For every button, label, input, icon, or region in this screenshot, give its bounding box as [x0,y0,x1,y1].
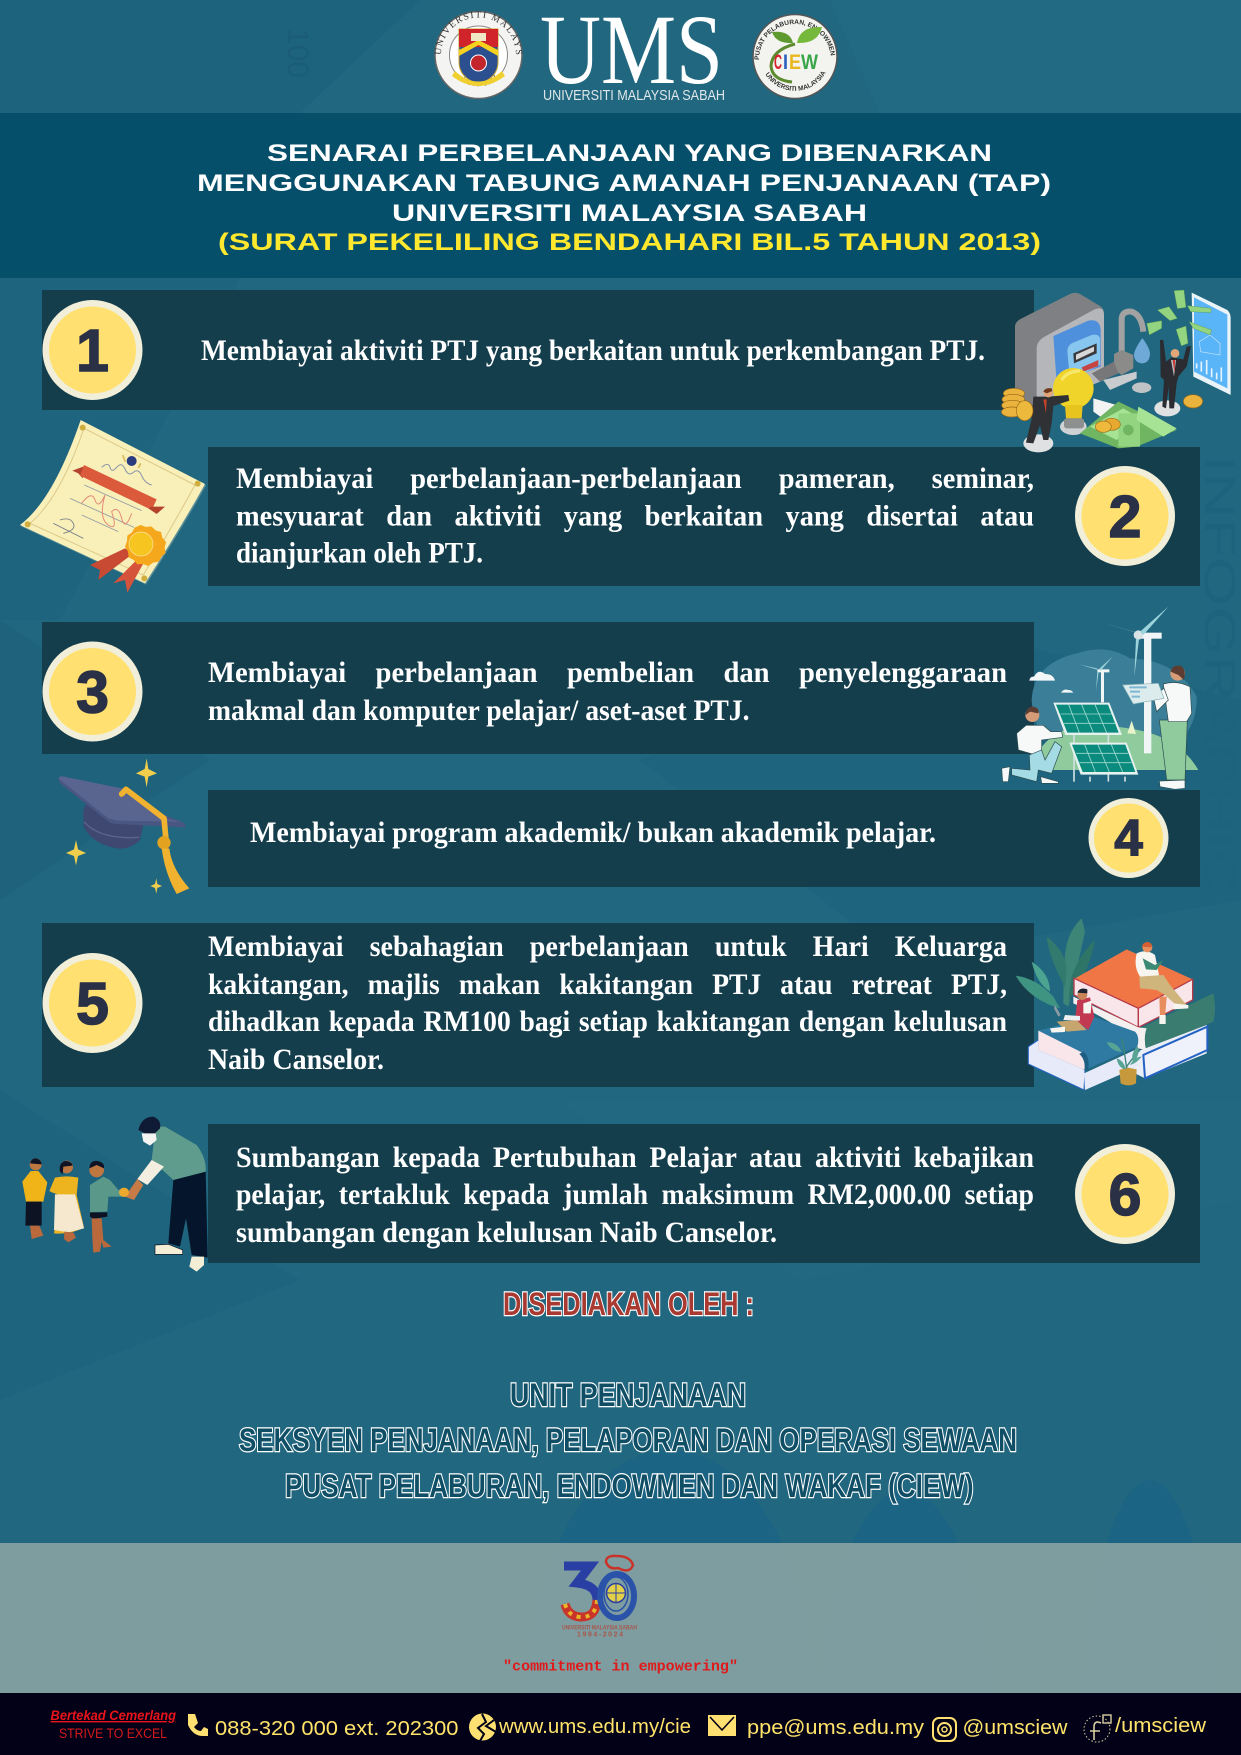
text block: unit details: PUSAT PELABURAN, ENDOWMEN DAN WAKAF (CIEW) [285,1468,974,1504]
text block: unit details: SEKSYEN PENJANAAN, PELAPORAN DAN OPERASI SEWAAN [239,1422,1017,1458]
text block: unit details: UNIT PENJANAAN [510,1377,746,1413]
icon: books and readers illustration [1016,918,1215,1090]
logo: UMS 30 years: UNIVERSITI MALAYSIA SABAH [562,1626,637,1632]
number badge 5: 5 [76,971,109,1037]
icon: utilities and money illustration [1001,290,1231,452]
number badge 6 [1075,1144,1175,1244]
background: 100 [281,28,314,78]
panel: item 1 [42,290,1034,410]
text: item 3 [208,657,1007,727]
panel: item 5 [42,923,1034,1087]
number badge 3: 3 [76,660,109,726]
icon: mail [708,1715,736,1736]
number badge 1: 1 [76,318,109,384]
text: item 5: kakitangan, majlis makan kakitangan PTJ atau retreat PTJ, [208,969,1007,1001]
number badge 4 [1088,798,1168,878]
number badge 4: 4 [1114,809,1143,866]
number badge 6: 6 [1109,1162,1141,1228]
contact: phone: 088-320 000 ext. 202300 [215,1718,458,1740]
panel: item 2 [208,447,1200,586]
text: item 2: Membiayai perbelanjaan-perbelanjaan pameran, seminar, [236,463,1034,495]
text: item 5: Membiayai sebahagian perbelanjaan untuk Hari Keluarga [208,931,1007,963]
title: SENARAI PERBELANJAAN YANG DIBENARKAN [267,140,992,167]
number badge 2 [1075,466,1175,566]
title: MENGGUNAKAN TABUNG AMANAH PENJANAAN (TAP) [197,170,1051,197]
text: item 6: sumbangan dengan kelulusan Naib Canselor. [236,1217,777,1249]
text: item 2: mesyuarat dan aktiviti yang berkaitan yang disertai atau [236,500,1034,532]
text: item 4: Membiayai program akademik/ bukan akademik pelajar. [250,817,936,849]
slogan [50,1707,176,1741]
number badge 3 [42,642,142,742]
logo: UMS 30 years: 1994-2024 [577,1632,623,1638]
contact: facebook: /umsciew [1115,1715,1207,1737]
contact: email: ppe@ums.edu.my [747,1717,924,1739]
title: (SURAT PEKELILING BENDAHARI BIL.5 TAHUN 2013) [218,229,1041,256]
logo: CIEW: W [801,51,818,74]
contact: instagram: @umsciew [962,1717,1068,1739]
text: item 5: Naib Canselor. [208,1044,384,1076]
logo: UMS crest: SABAH [464,74,495,86]
text block: unit details [239,1377,1017,1504]
panel: title band [0,113,1241,278]
panel: item 4 [208,790,1200,887]
text: item 2 [236,463,1034,570]
text: item 6: pelajar, tertakluk kepada jumlah maksimum RM2,000.00 setiap [236,1179,1034,1211]
icon: graduation cap [58,758,189,894]
text: item 6: Sumbangan kepada Pertubuhan Pelajar atau aktiviti kebajikan [236,1142,1034,1174]
contact: website: www.ums.edu.my/cie [498,1716,691,1738]
icon: instagram [933,1718,956,1741]
logo: CIEW: C [774,51,782,74]
panel: item 3 [42,622,1034,754]
icon: renewable energy illustration [1002,607,1198,789]
number badge 1 [42,300,142,400]
icon: globe [469,1714,496,1741]
logo: UMS crest [434,10,523,100]
logo: UMS 30 years [562,1556,637,1638]
number badge 5 [42,953,142,1053]
slogan: STRIVE TO EXCEL [59,1725,167,1741]
logo: university name: UNIVERSITI MALAYSIA SABAH [543,87,725,104]
text: item 6 [236,1142,1034,1249]
text: item 1: Membiayai aktiviti PTJ yang berkaitan untuk perkembangan PTJ. [201,335,985,367]
panel: anniversary band [0,1543,1241,1693]
text: item 2: dianjurkan oleh PTJ. [236,538,483,570]
text: item 3: Membiayai perbelanjaan pembelian dan penyelenggaraan [208,657,1007,689]
text: item 5: dihadkan kepada RM100 bagi setiap kakitangan dengan kelulusan [208,1006,1007,1038]
text: item 3: makmal dan komputer pelajar/ aset-aset PTJ. [208,695,750,727]
slogan: Bertekad Cemerlang [50,1707,176,1723]
logos header [434,0,838,105]
number badge 2: 2 [1109,484,1141,550]
heading: prepared by: DISEDIAKAN OLEH : [503,1286,754,1322]
logo: CIEW: I [783,51,788,74]
icon: facebook [1084,1715,1111,1742]
icon: phone [188,1714,208,1736]
logo: CIEW: E [789,51,801,74]
logo: CIEW [752,14,838,100]
panel: footer [0,1693,1241,1755]
icon: certificate [20,420,206,593]
icon: man greeting children illustration [22,1117,208,1272]
title: UNIVERSITI MALAYSIA SABAH [392,200,867,227]
tagline: "commitment in empowering" [503,1658,738,1676]
panel: item 6 [208,1124,1200,1263]
title [197,140,1051,256]
text: item 5 [208,931,1007,1076]
